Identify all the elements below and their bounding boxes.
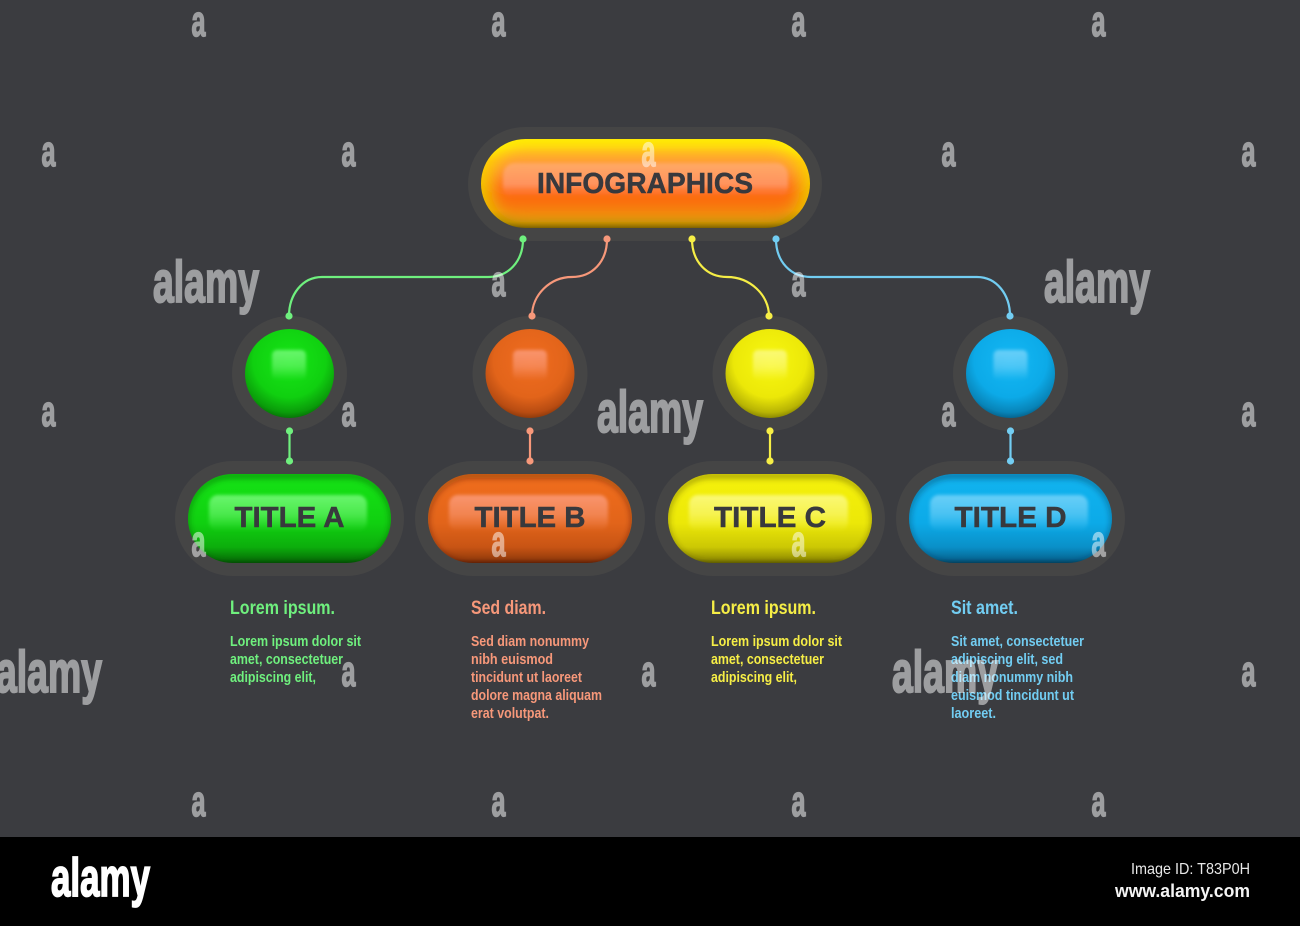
text block: column A [230, 598, 361, 686]
watermark: repeated small marks: a [1242, 387, 1256, 436]
watermark: repeated small marks: a [1242, 647, 1256, 696]
watermark: repeated small marks: a [342, 387, 356, 436]
heading: infographics: INFOGRAPHICS [537, 168, 753, 200]
watermark: repeated small marks: a [42, 387, 56, 436]
connector: orange sphere to title B [526, 427, 534, 465]
heading: title D: TITLE D [954, 502, 1066, 534]
text block: column C: Lorem ipsum dolor sit [711, 633, 842, 650]
watermark: repeated small marks: a [942, 127, 956, 176]
watermark: large marks: alamy [892, 640, 998, 705]
icon: yellow sphere [712, 316, 828, 431]
watermark: repeated small marks: a [1092, 517, 1106, 566]
watermark: repeated small marks: a [792, 517, 806, 566]
watermark: repeated small marks: a [492, 517, 506, 566]
icon: green sphere [232, 316, 347, 431]
watermark: large marks: alamy [153, 250, 259, 315]
connector: yellow sphere to title C [766, 427, 774, 465]
text block: column D: diam nonummy nibh [951, 669, 1073, 686]
watermark: large marks: alamy [0, 640, 102, 705]
text block: column B: Sed diam. [471, 598, 546, 619]
text block: column D [951, 598, 1084, 722]
watermark: repeated small marks: a [642, 647, 656, 696]
watermark: large marks: alamy [597, 380, 703, 445]
panel: title A pill [175, 461, 404, 576]
panel: title D pill [896, 461, 1125, 576]
connector: main to C [688, 235, 773, 320]
connector: main to D [772, 235, 1014, 320]
text block: column C: adipiscing elit, [711, 669, 797, 686]
text block: column C: amet, consectetuer [711, 651, 824, 668]
text block: column C: Lorem ipsum. [711, 598, 816, 619]
heading: title C: TITLE C [714, 502, 826, 534]
footer image id: Image ID: T83P0H [1131, 861, 1250, 878]
panel: title C pill [655, 461, 885, 576]
watermark: repeated small marks: a [192, 517, 206, 566]
watermark: repeated small marks: a [492, 777, 506, 826]
watermark: repeated small marks: a [492, 257, 506, 306]
text block: column A: amet, consectetuer [230, 651, 343, 668]
text block: column C [711, 598, 842, 686]
panel: main infographics pill [468, 127, 822, 241]
watermark: repeated small marks: a [42, 127, 56, 176]
text block: column B: Sed diam nonummy [471, 633, 590, 650]
text block: column A: Lorem ipsum. [230, 598, 335, 619]
watermark: repeated small marks: a [1242, 127, 1256, 176]
heading: title B: TITLE B [474, 502, 586, 534]
text block: column B: erat volutpat. [471, 705, 549, 722]
icon: orange sphere [472, 316, 588, 431]
footer url: www.alamy.com [1114, 881, 1250, 901]
watermark: large marks: alamy [1044, 250, 1150, 315]
connector: main to A [285, 235, 527, 320]
text block: column B: tincidunt ut laoreet [471, 669, 582, 686]
watermark: repeated small marks: a [342, 647, 356, 696]
text block: column A: Lorem ipsum dolor sit [230, 633, 361, 650]
watermark: repeated small marks: a [192, 777, 206, 826]
connector: main to B [528, 235, 611, 320]
watermark: repeated small marks: a [792, 777, 806, 826]
text block: column D: adipiscing elit, sed [951, 651, 1063, 668]
watermark: repeated small marks: a [942, 387, 956, 436]
connector: blue sphere to title D [1007, 427, 1014, 465]
text block: column D: Sit amet. [951, 598, 1018, 619]
panel: title B pill [415, 461, 645, 576]
text block: column A: adipiscing elit, [230, 669, 316, 686]
text block: column B: dolore magna aliquam [471, 687, 602, 704]
connector: green sphere to title A [286, 427, 293, 465]
text block: column B [471, 598, 602, 722]
watermark: repeated small marks: a [642, 127, 656, 176]
watermark: repeated small marks: a [1092, 777, 1106, 826]
heading: title A: TITLE A [234, 502, 345, 534]
text block: column B: nibh euismod [471, 651, 553, 668]
watermark: large marks [0, 250, 1150, 705]
watermark: repeated small marks: a [342, 127, 356, 176]
text block: column D: laoreet. [951, 705, 996, 722]
text block: column D: euismod tincidunt ut [951, 687, 1074, 704]
text block: column D: Sit amet, consectetuer [951, 633, 1084, 650]
footer logo: alamy [51, 848, 150, 908]
footer bar [0, 837, 1300, 926]
icon: blue sphere [953, 316, 1068, 431]
watermark: repeated small marks: a [792, 257, 806, 306]
